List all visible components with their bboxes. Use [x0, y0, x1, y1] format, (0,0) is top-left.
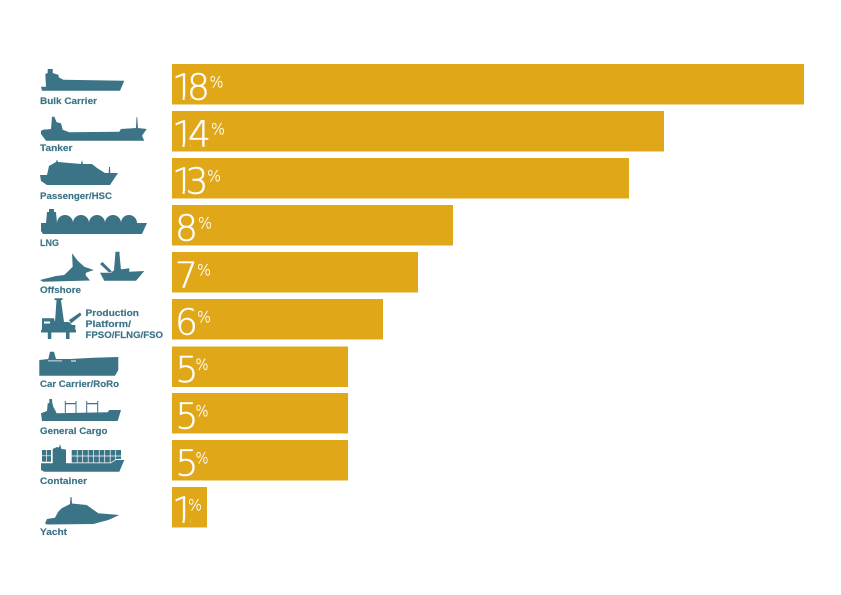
bar: 5%: 5 [176, 444, 198, 484]
label: Production Platform/FPSO/FLNG/FSO [86, 308, 163, 340]
bar: 14%: 4 [188, 114, 211, 156]
bar: 6% [172, 299, 383, 344]
label: Container: Container [40, 476, 87, 486]
bar: 1%: % [188, 496, 202, 514]
bar: 18%: 1 [172, 68, 195, 108]
icon: passenger ship [40, 160, 118, 185]
bar: 7%: 7 [175, 256, 198, 296]
bar: 13% [172, 158, 629, 202]
bar: 18% [172, 64, 804, 108]
bar: 18%: 8 [187, 68, 210, 108]
row: Passenger/HSC [40, 158, 629, 202]
bar: 6%: 6 [175, 302, 198, 344]
bar: 14%: % [211, 120, 225, 138]
bar: 18%: % [210, 72, 224, 92]
bar: 5% [172, 346, 348, 391]
label: Production Platform/FPSO/FLNG/FSO: Platform/ [86, 319, 132, 329]
label: Tanker: Tanker [40, 143, 73, 153]
label: Yacht: Yacht [40, 527, 67, 537]
icon: general cargo ship [41, 399, 121, 421]
row: LNG [40, 205, 453, 250]
bar: 7%: % [197, 260, 211, 280]
bar: 8%: 8 [175, 208, 198, 250]
row: Container [40, 440, 348, 486]
icon: yacht [45, 497, 119, 524]
bar: 7% [172, 252, 418, 296]
bar: 1%: 1 [172, 490, 195, 532]
bar: 5%: % [196, 402, 208, 420]
icon: bulk carrier [41, 69, 124, 91]
bar: 6%: % [197, 308, 211, 326]
bar: 5%: % [196, 355, 208, 374]
row: General Cargo [40, 393, 348, 438]
label: General Cargo: General Cargo [40, 426, 108, 436]
icon: production platform [41, 298, 82, 339]
icon: offshore vessels [40, 252, 144, 282]
bar: 13%: 3 [186, 162, 208, 202]
bar: 14%: 1 [172, 114, 195, 156]
bar: 5%: % [196, 448, 208, 468]
row: Tanker [40, 111, 664, 156]
bar: 13%: % [207, 166, 221, 186]
bar: 14% [172, 111, 664, 156]
bar: 5% [172, 440, 348, 484]
icon: car carrier [39, 352, 118, 376]
bar: 8% [172, 205, 453, 250]
bar: 5%: 5 [176, 350, 198, 391]
bar: 1% [172, 487, 207, 532]
label: Production Platform/FPSO/FLNG/FSO: Production [86, 308, 139, 318]
row: Bulk Carrier [40, 64, 804, 108]
label: Passenger/HSC: Passenger/HSC [40, 191, 112, 201]
row: Yacht [40, 487, 207, 537]
label: Production Platform/FPSO/FLNG/FSO: FPSO/FLNG/FSO [86, 330, 163, 340]
bar: 5% [172, 393, 348, 438]
icon: tanker [41, 117, 147, 141]
icon: LNG carrier [41, 209, 147, 234]
row: Offshore [40, 252, 418, 296]
row: Production Platform/FPSO/FLNG/FSO [41, 298, 383, 344]
bar: 13%: 1 [172, 162, 195, 202]
label: Car Carrier/RoRo: Car Carrier/RoRo [40, 379, 119, 389]
bar: 5%: 5 [176, 396, 198, 438]
label: LNG: LNG [40, 238, 59, 248]
label: Bulk Carrier: Bulk Carrier [40, 96, 97, 106]
label: Offshore: Offshore [40, 285, 81, 295]
bar: 8%: % [198, 214, 212, 232]
icon: container ship [41, 444, 124, 472]
row: Car Carrier/RoRo [39, 346, 348, 391]
